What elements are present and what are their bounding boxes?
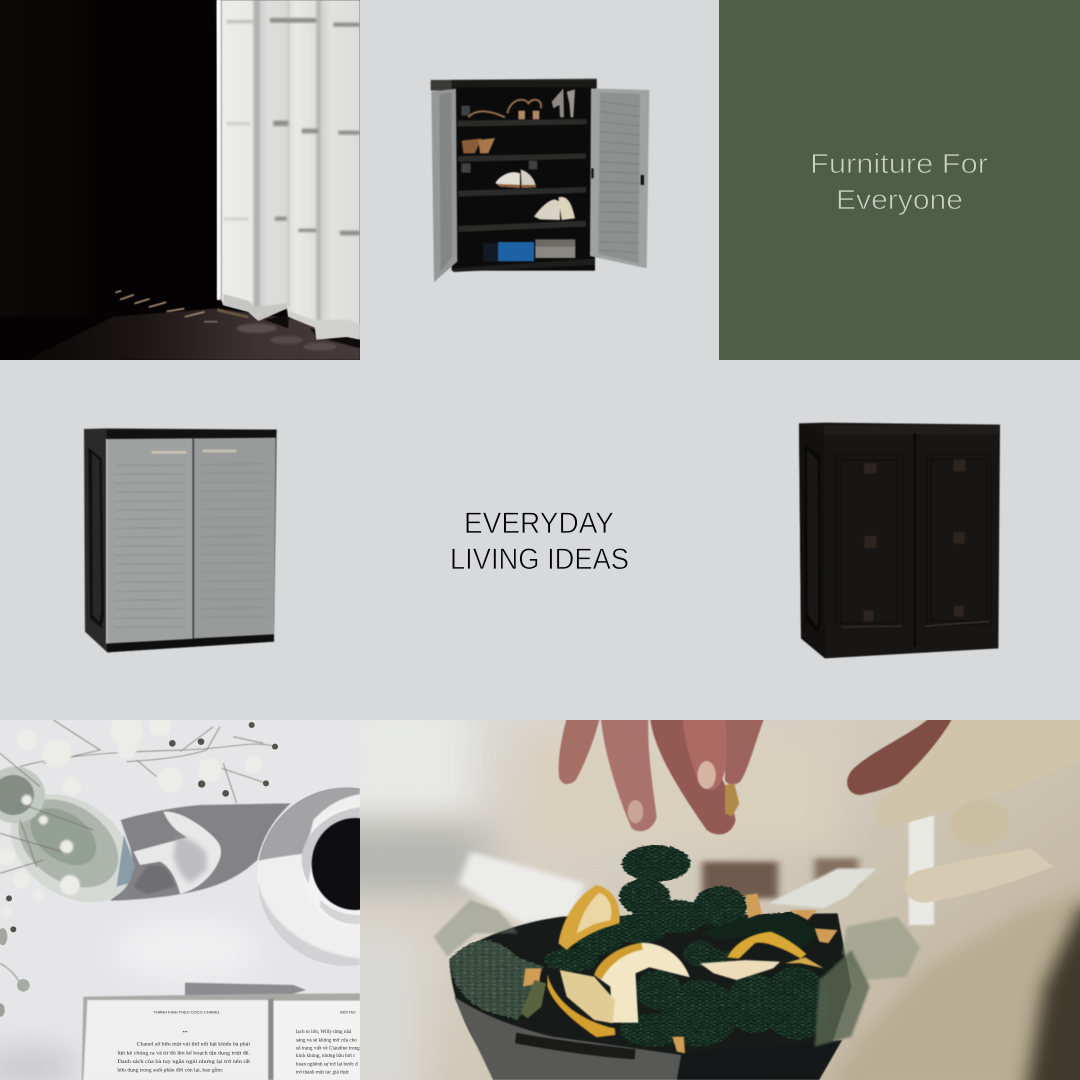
book text: trở thành một tác giả thực (296, 1069, 350, 1075)
saucer (258, 787, 360, 966)
book text: ••• (183, 1031, 188, 1036)
book text: kinh khủng, nhưng bầu hơi c (296, 1052, 356, 1059)
heading: Everyday Living Ideas: LIVING IDEAS (450, 543, 629, 576)
shelves (457, 119, 587, 232)
book text: lạch to lớn, Willy từng nhắ (296, 1028, 352, 1035)
coffee cup (302, 807, 402, 926)
photo: table with vase, coffee and open book (0, 720, 360, 1080)
light slits under curtain (116, 291, 204, 317)
boxes (498, 242, 534, 261)
heading: Furniture For Everyone: Furniture For (810, 148, 988, 179)
door left (431, 89, 457, 282)
vase (0, 767, 153, 925)
heading: Everyday Living Ideas (450, 507, 629, 576)
door right (590, 88, 649, 268)
book text: số trang viết về Claudine trong (296, 1045, 360, 1052)
vent squares (461, 106, 537, 173)
book text: liệt kê chúng ra và từ đó lên kế hoạch tận dụng triệt để. (117, 1049, 250, 1056)
fingers (559, 718, 764, 834)
cast shadow (110, 803, 291, 901)
book text: sáng và sẽ không mở cửa cho (296, 1037, 357, 1043)
book text: Danh sách của bà tuy ngắn ngủi nhưng lại trở nên rất (117, 1058, 251, 1065)
sheer curtain (217, 0, 360, 348)
book text: hoan nghênh sự trở lại bước đ (296, 1061, 358, 1067)
product: closed grey cabinet (84, 428, 277, 652)
blurred background (323, 700, 934, 1080)
book text: hữu dụng trong suốt phần đời còn lại, bao gồm: (117, 1067, 224, 1074)
heading: Everyday Living Ideas: EVERYDAY (464, 507, 614, 540)
book text: KIẾN TẠO (340, 1009, 356, 1014)
vent squares (864, 459, 965, 621)
photo: hands garnishing a salad pan (360, 720, 1080, 1080)
heading: Furniture For Everyone (810, 148, 988, 215)
greens (450, 845, 831, 1047)
book text: Chanel sở hữu một vài thứ nổi bật khiến bà phải (137, 1041, 251, 1048)
photo: dark curtain and sheer window curtain (0, 0, 360, 360)
handles (152, 451, 186, 454)
carpet (27, 308, 360, 360)
product: open shoe cabinet (431, 79, 649, 282)
lemons (521, 885, 838, 1053)
heading: Furniture For Everyone: Everyone (836, 184, 963, 215)
shoes (468, 100, 541, 117)
book text (117, 1009, 360, 1075)
open book (82, 983, 360, 1080)
baby's breath branches (0, 720, 277, 983)
panel: green block with tagline (719, 0, 1080, 360)
product: closed black cabinet (799, 423, 1000, 658)
blurred foreground (828, 880, 1080, 1080)
book text: THÁNH KINH THEO COCO CHANEL (153, 1010, 220, 1014)
pan (450, 913, 851, 1080)
